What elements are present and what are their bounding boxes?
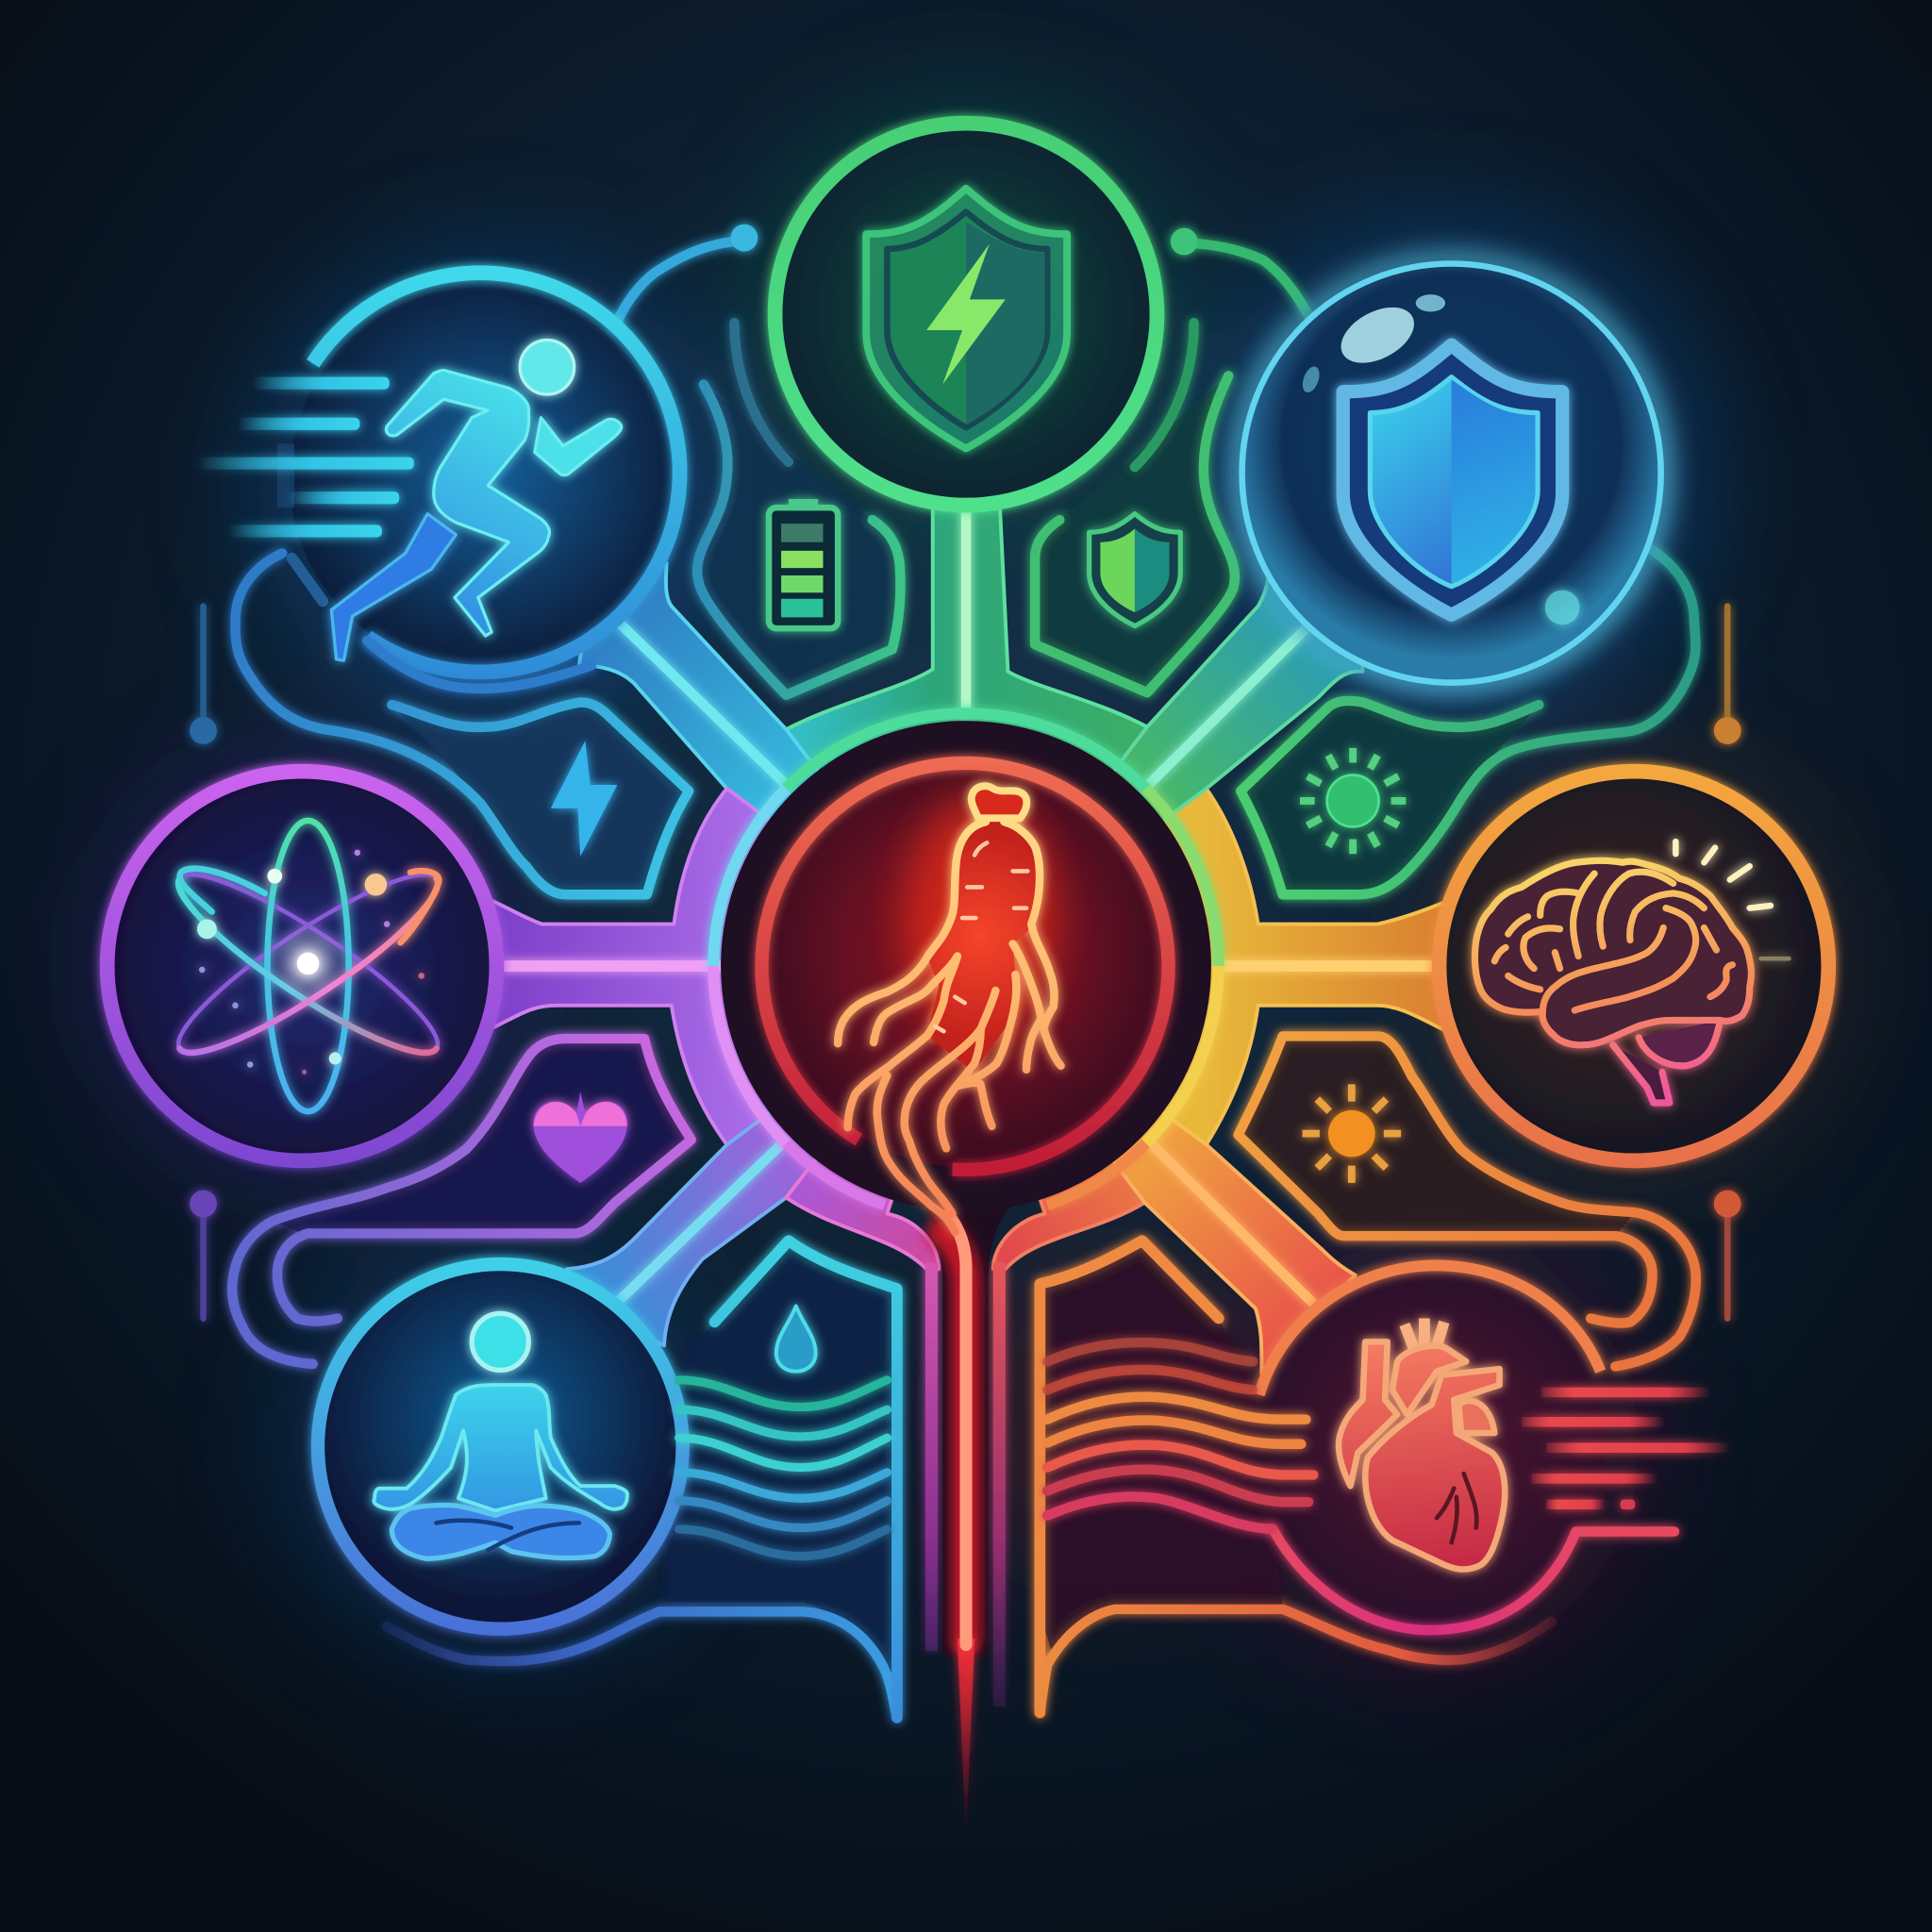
icon: atom [162, 821, 454, 1111]
network band: south-east [966, 966, 1356, 1374]
icon: ginseng root [838, 786, 1061, 1232]
figure torso and arms [374, 1385, 627, 1510]
panel: protective bubble [1242, 264, 1661, 683]
ginseng ridges [935, 842, 1027, 1031]
panel: cognition brain [1440, 772, 1828, 1160]
compartment: water drop [387, 1241, 897, 1718]
meditation ring [318, 1264, 683, 1629]
heart left side chamber [1339, 1341, 1397, 1486]
connector: top right with dot [1171, 228, 1308, 315]
atom orbit back arcs [162, 852, 454, 1075]
atom top arc teal [180, 869, 265, 912]
dark funnel behind stem [918, 1201, 1017, 1657]
atom vertical orbit [267, 821, 349, 1111]
atom top arc orange [400, 871, 439, 942]
icon: anatomical heart [1339, 1319, 1505, 1570]
network band: north [786, 492, 1147, 966]
icon: small green shield [1090, 514, 1180, 626]
stem: central root line [937, 1201, 974, 1842]
network band: south right [966, 966, 1144, 1269]
heart vessels [1437, 1474, 1476, 1542]
icon: orange sun [1303, 1084, 1401, 1183]
panel: stamina runner [196, 273, 680, 689]
brain stem [1613, 1045, 1670, 1103]
icon: shield with bolt [866, 189, 1067, 448]
panel: heart [1047, 1265, 1730, 1630]
atom bright arc A [162, 878, 437, 1075]
compartment: lightning path [235, 553, 689, 894]
faint bar behind speed lines [277, 443, 294, 508]
connector: right lower dot [1714, 1191, 1741, 1319]
icon: blue shield [1343, 345, 1562, 615]
nucleus [297, 953, 319, 974]
network band: north-west [579, 563, 966, 966]
compartment: orange sun path [1239, 1036, 1696, 1366]
runner ring [313, 273, 680, 672]
stem core [937, 1201, 966, 1645]
speed lines [196, 377, 414, 537]
icon: meditating figure [374, 1313, 627, 1558]
figure crossed legs [391, 1506, 610, 1558]
brain spark rays [1675, 841, 1771, 908]
icon: battery [769, 499, 838, 628]
stem glow [941, 1232, 966, 1639]
compartment: green sun path [1241, 548, 1695, 894]
atom bright arc B [179, 878, 454, 1075]
icon: green sun [1300, 748, 1406, 854]
center red disc [765, 765, 1167, 1167]
icon: blue lightning [551, 741, 617, 857]
ginseng crown [972, 786, 1026, 818]
waves: heart side [1047, 1342, 1313, 1529]
heart ventricle [1365, 1369, 1505, 1570]
connector: right upper dot [1714, 607, 1741, 744]
waves: water side [679, 1380, 887, 1557]
ginseng rootlets and outline [838, 822, 1061, 1232]
brain ring [1440, 772, 1828, 1160]
vertical side rails [931, 1263, 999, 1707]
icon: runner [331, 340, 622, 660]
connector: top left with dot [615, 225, 758, 326]
runner ring lower outer arc [367, 641, 591, 689]
compartment: small shield [1035, 323, 1235, 692]
spokes [500, 499, 1436, 1304]
panel: meditation [318, 1264, 683, 1629]
runner upper body and front leg [386, 371, 549, 636]
center red ring [761, 763, 1168, 1170]
ring [775, 124, 1157, 506]
network band: west [468, 789, 966, 1144]
panel: center ginseng [721, 721, 1211, 1232]
icon: water drop [776, 1306, 816, 1372]
brain cerebellum [1639, 1020, 1720, 1066]
runner disc [290, 287, 672, 669]
ginseng red halo [903, 794, 1056, 1041]
panel: cellular atom [108, 772, 496, 1160]
bubble sphere [1242, 264, 1661, 683]
compartment: orange heart side [1040, 1241, 1551, 1713]
heart arch [1392, 1346, 1466, 1414]
small arc [292, 558, 323, 601]
connector: left lower dot [190, 1191, 217, 1319]
heart ring lower arc [1273, 1529, 1674, 1630]
compartment: battery [697, 323, 900, 695]
speed lines: heart side [1522, 1388, 1730, 1509]
center outer edge glow ring [713, 713, 1219, 1205]
network band: south left [786, 966, 966, 1269]
stem taper [958, 1639, 974, 1842]
electrons [197, 919, 217, 939]
heart disc [1256, 1273, 1606, 1623]
icon: small purple heart [533, 1091, 627, 1183]
panel: immunity energy shield [775, 124, 1157, 506]
brain folds [1494, 872, 1732, 1013]
network band: east [966, 789, 1466, 1144]
bubble highlights [1299, 294, 1579, 625]
lightning bolt [926, 244, 1006, 385]
compartment: purple heart path [232, 1039, 691, 1364]
icon: brain [1474, 841, 1789, 1103]
brain cortex [1474, 860, 1751, 1045]
sparks [355, 850, 360, 856]
runner head [520, 340, 575, 394]
heart aorta branches [1405, 1319, 1444, 1351]
network band: north-east [966, 563, 1363, 966]
runner front arm [535, 418, 622, 475]
heart ring upper arc [1259, 1265, 1601, 1395]
network band: south-west [567, 966, 966, 1345]
ginseng body [926, 821, 1040, 1072]
runner back leg [331, 514, 456, 660]
ambient colour halos [98, 111, 1831, 1657]
connector: left upper dot [190, 607, 217, 744]
heart small chamber [1458, 1401, 1494, 1433]
atom ring [108, 772, 496, 1160]
center dark disc [721, 721, 1211, 1211]
